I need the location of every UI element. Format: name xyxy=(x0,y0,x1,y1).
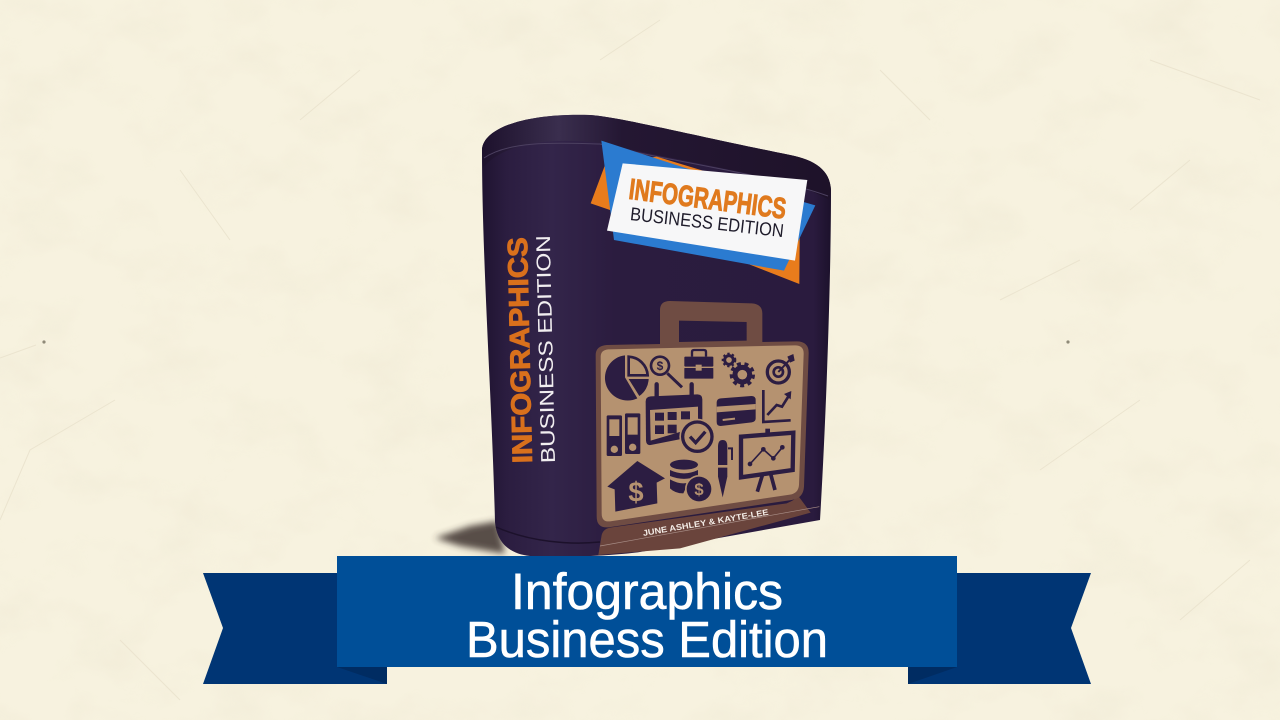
briefcase illustration xyxy=(596,301,819,555)
label orange backing xyxy=(591,157,800,284)
icon: magnifier with dollar xyxy=(651,357,682,387)
label subtitle: BUSINESS EDITION xyxy=(629,203,785,241)
icon: credit card xyxy=(717,396,756,426)
box body xyxy=(482,115,831,557)
banner title line 2: Business Edition xyxy=(466,611,828,668)
banner left tail xyxy=(203,573,387,684)
banner right fold xyxy=(908,667,957,684)
icon: target xyxy=(767,354,795,383)
front label xyxy=(591,141,815,284)
banner xyxy=(203,556,1091,684)
icon: pie chart xyxy=(605,355,649,401)
banner left fold xyxy=(337,667,387,684)
author line: JUNE ASHLEY & KAYTE-LEE xyxy=(642,507,770,538)
icon: gears xyxy=(723,354,753,386)
icon: presentation board xyxy=(741,429,793,492)
spine title: INFOGRAPHICS xyxy=(502,237,538,464)
box top rim xyxy=(482,115,831,200)
briefcase inner xyxy=(601,345,804,521)
label white card xyxy=(607,163,807,261)
briefcase lower band xyxy=(598,496,811,555)
icon: binders xyxy=(607,413,640,456)
banner right tail xyxy=(908,573,1091,684)
product box xyxy=(435,115,831,557)
box shadow xyxy=(435,521,505,554)
briefcase handle xyxy=(660,301,762,347)
icon: portfolio xyxy=(684,350,713,379)
spine subtitle: BUSINESS EDITION xyxy=(533,235,560,463)
icon: check badge xyxy=(679,419,715,455)
icon: magnifier with dollar: $ xyxy=(657,359,664,373)
banner title line 1: Infographics xyxy=(511,563,783,620)
icon: coins xyxy=(670,460,713,503)
icon: house with dollar: $ xyxy=(628,476,644,507)
banner main panel xyxy=(337,556,957,667)
briefcase outer xyxy=(596,341,809,527)
label title: INFOGRAPHICS xyxy=(627,173,788,226)
icon: coins: $ xyxy=(694,480,704,499)
icon: calendar xyxy=(646,384,702,445)
icon: pen xyxy=(718,440,732,497)
icon: growth chart xyxy=(763,390,791,422)
icon: house with dollar xyxy=(607,461,665,512)
label blue backing xyxy=(601,141,815,271)
